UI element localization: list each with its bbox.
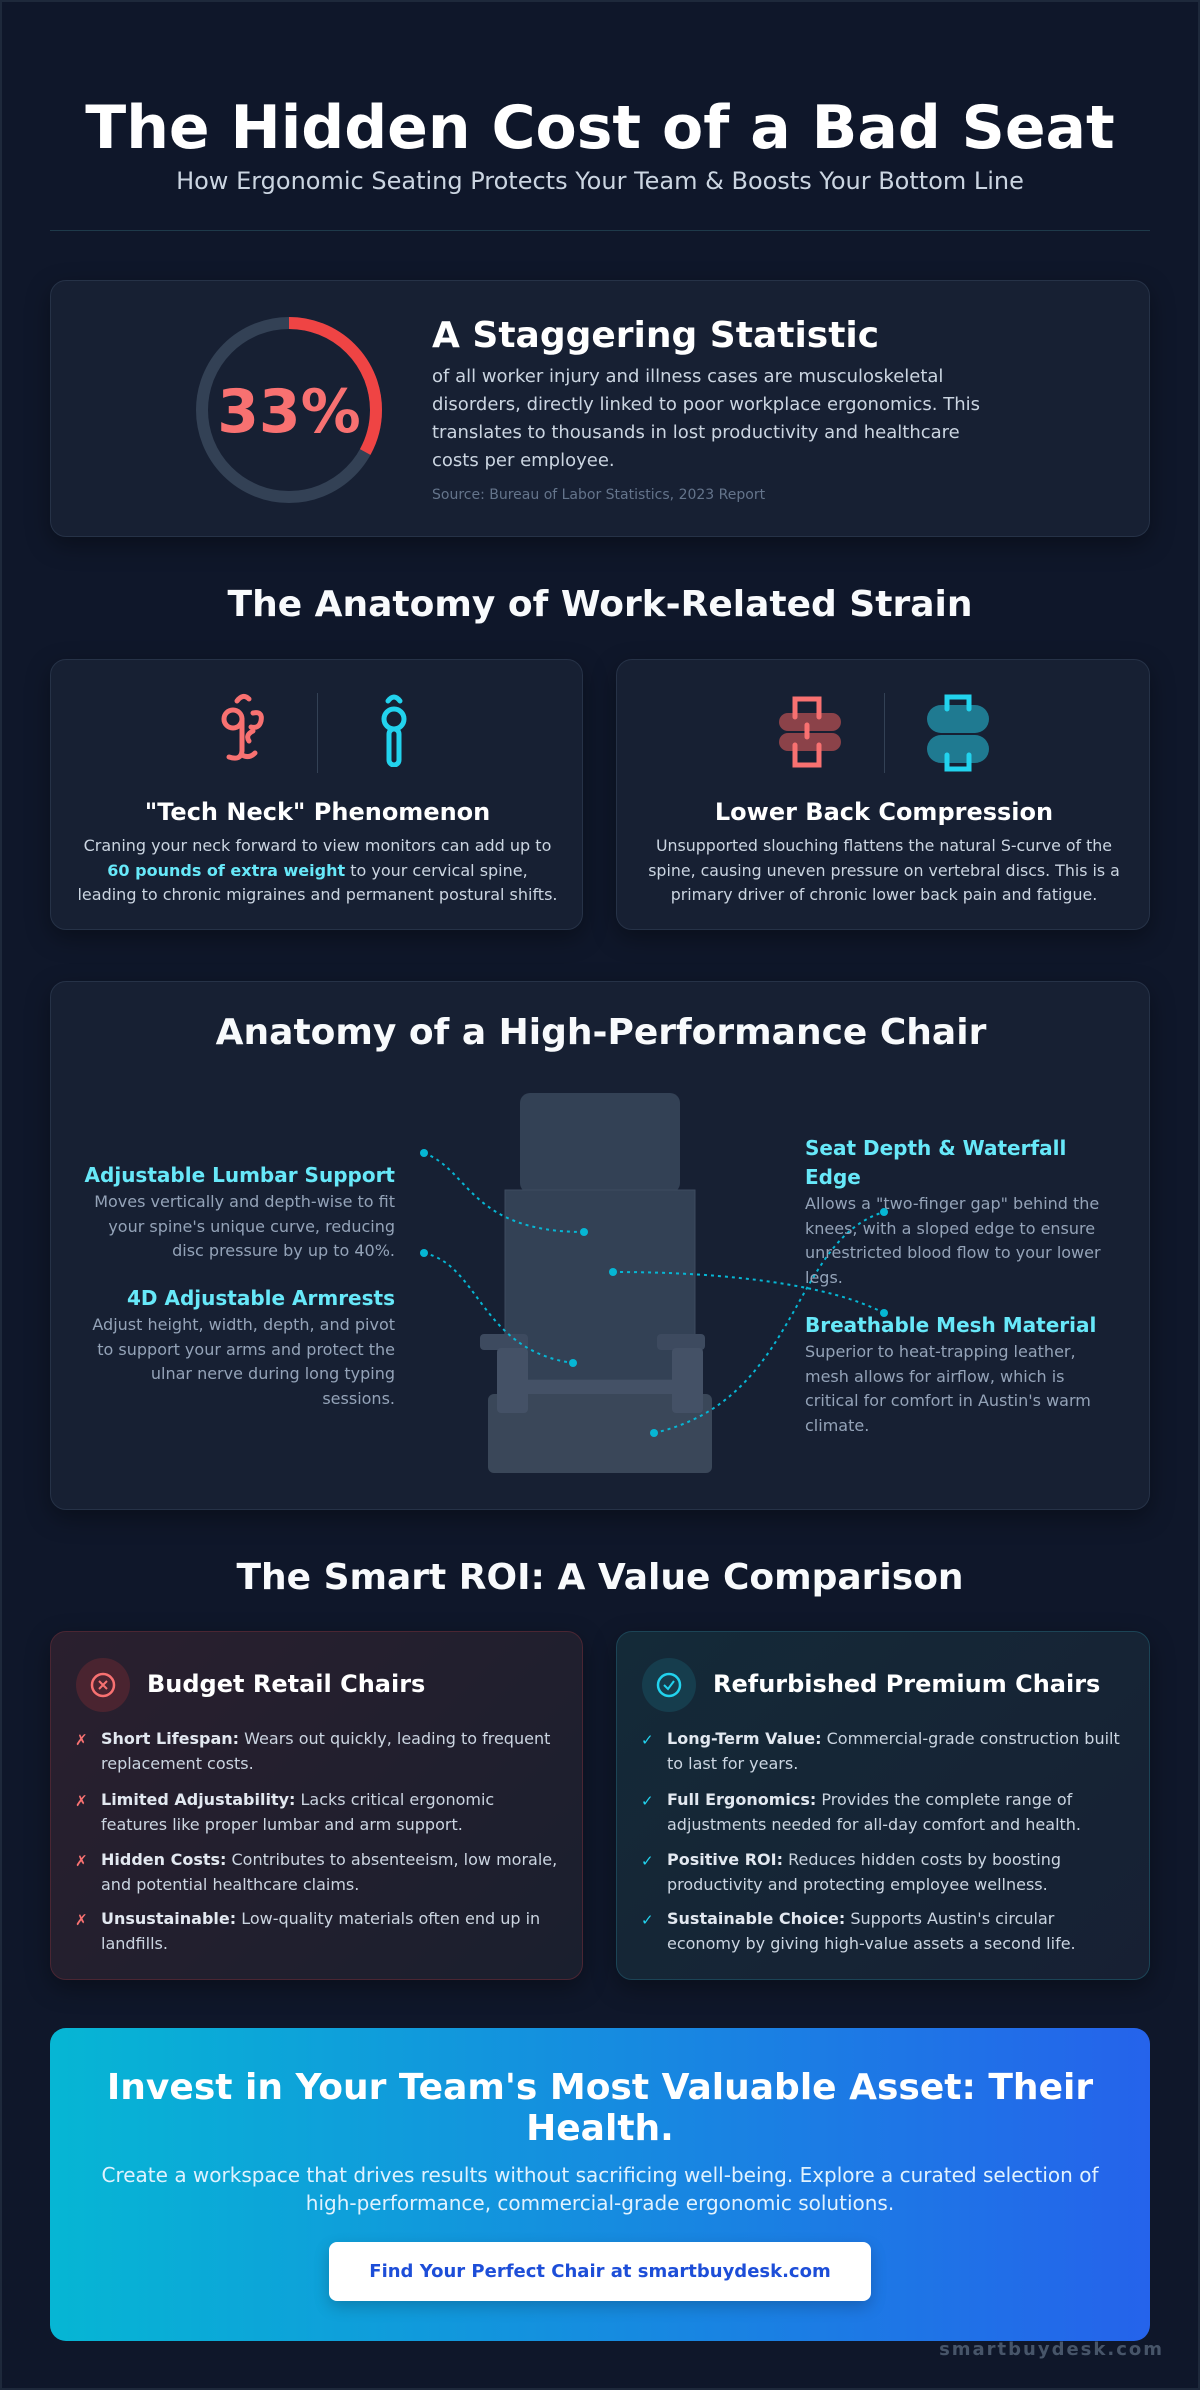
panel: refurbished chairs: ✓ xyxy=(641,1911,654,1929)
callout: lumbar: Moves vertically and depth-wise to fit xyxy=(94,1192,395,1211)
card text xyxy=(648,836,1120,904)
callout: seat depth: legs. xyxy=(805,1268,843,1286)
callout: armrests xyxy=(92,1286,395,1408)
CTA text: high-performance, commercial-grade ergonomic solutions. xyxy=(306,2191,894,2215)
icon: x circle xyxy=(76,1658,130,1712)
card title: Refurbished Premium Chairs xyxy=(713,1670,1100,1698)
panel: tech neck xyxy=(50,659,583,930)
panel: refurbished chairs xyxy=(616,1631,1150,1980)
callout: mesh: Superior to heat-trapping leather, xyxy=(805,1342,1076,1361)
callout: mesh: Breathable Mesh Material xyxy=(805,1313,1096,1337)
panel: refurbished chairs: Full Ergonomics: Provides the complete range of adjustments needed for all-day comfort and health. xyxy=(667,1790,1081,1834)
panel: budget chairs: Unsustainable: Low-quality materials often end up in landfills. xyxy=(101,1909,540,1953)
card text: Craning your neck forward to view monitors can add up to xyxy=(84,836,551,855)
card title: Budget Retail Chairs xyxy=(147,1670,425,1698)
callout: seat depth xyxy=(805,1136,1101,1286)
callout: mesh: mesh allows for airflow, which is xyxy=(805,1366,1064,1386)
footer brand: smartbuydesk.com xyxy=(939,2339,1164,2360)
list: Short Lifespan: Wears out quickly, leading to frequent replacement costs. xyxy=(101,1729,550,1773)
panel: refurbished chairs: ✓ xyxy=(641,1792,654,1810)
callout: armrests: to support your arms and protect the xyxy=(97,1340,395,1358)
callout: mesh: climate. xyxy=(805,1416,869,1434)
panel: budget chairs: ✗ xyxy=(75,1852,88,1870)
icon: check circle xyxy=(642,1658,696,1712)
list: Long-Term Value: Commercial-grade construction built to last for years. xyxy=(667,1729,1120,1773)
chart: 33% ring xyxy=(196,317,382,503)
callout: armrests: 4D Adjustable Armrests xyxy=(127,1286,395,1310)
callout: seat depth: knees, with a sloped edge to ensure xyxy=(805,1218,1095,1238)
card text: Unsupported slouching flattens the natural S-curve of the xyxy=(656,836,1112,855)
card text: 60 pounds of extra weight to your cervical spine, xyxy=(107,860,528,880)
panel: lower back xyxy=(616,659,1150,930)
title: The Hidden Cost of a Bad Seat xyxy=(85,93,1115,163)
callout: armrests: Adjust height, width, depth, and pivot xyxy=(92,1315,395,1334)
callout: armrests: ulnar nerve during long typing xyxy=(151,1364,395,1383)
panel: chair anatomy xyxy=(50,981,1150,1510)
button: Find Your Perfect Chair at smartbuydesk.com xyxy=(369,2261,831,2282)
callout: seat depth: Edge xyxy=(805,1165,861,1189)
CTA heading: Invest in Your Team's Most Valuable Asset: Their Health. xyxy=(107,2067,1093,2149)
panel: refurbished chairs: Positive ROI: Reduces hidden costs by boosting productivity and protecting employee wellness. xyxy=(667,1850,1061,1894)
subtitle: How Ergonomic Seating Protects Your Team & Boosts Your Bottom Line xyxy=(176,167,1024,195)
heading: A Staggering Statistic xyxy=(432,315,879,356)
panel: budget chairs: ✗ xyxy=(75,1731,88,1749)
callout: armrests: sessions. xyxy=(322,1388,395,1408)
icon: good neck posture xyxy=(382,694,406,767)
callout: mesh: critical for comfort in Austin's warm xyxy=(805,1391,1091,1410)
body text: of all worker injury and illness cases are musculoskeletal disorders, directly linked to poor workplace ergonomics. This translates to thousands in lost productivity and healthcare costs per employee. xyxy=(432,366,980,471)
card text xyxy=(77,836,558,904)
panel: budget chairs: Limited Adjustability: Lacks critical ergonomic features like proper lumbar and arm support. xyxy=(101,1790,494,1834)
chair diagram xyxy=(420,1093,888,1473)
heading: Anatomy of a High-Performance Chair xyxy=(216,1012,986,1053)
callout: seat depth: Allows a "two-finger gap" behind the xyxy=(805,1194,1099,1213)
panel: refurbished chairs: ✓ xyxy=(641,1731,654,1749)
panel: statistic xyxy=(50,280,1150,537)
callout: seat depth: unrestricted blood flow to your lower xyxy=(805,1243,1101,1262)
panel: budget chairs: Hidden Costs: Contributes to absenteeism, low morale, and potential healthcare claims. xyxy=(101,1850,557,1894)
CTA text xyxy=(102,2163,1099,2215)
callout: lumbar: disc pressure by up to 40%. xyxy=(172,1241,395,1260)
panel: refurbished chairs: Sustainable Choice: Supports Austin's circular economy by giving high-value assets a second life. xyxy=(667,1909,1076,1953)
callout: seat depth: Seat Depth & Waterfall xyxy=(805,1136,1066,1160)
panel: refurbished chairs: ✓ xyxy=(641,1852,654,1870)
panel: call to action xyxy=(50,2028,1150,2341)
chart: 33% ring: 33% xyxy=(217,377,361,447)
card text: primary driver of chronic lower back pain and fatigue. xyxy=(671,885,1097,904)
panel: budget chairs: ✗ xyxy=(75,1792,88,1810)
callout: lumbar xyxy=(84,1163,395,1260)
callout: lumbar: Adjustable Lumbar Support xyxy=(85,1163,395,1187)
icon: compressed discs xyxy=(779,696,841,768)
heading: strain: The Anatomy of Work-Related Strain xyxy=(228,584,972,625)
panel: budget chairs: ✗ xyxy=(75,1911,88,1929)
CTA text: Create a workspace that drives results without sacrificing well-being. Explore a curated selection of xyxy=(102,2163,1098,2187)
card text: spine, causing uneven pressure on vertebral discs. This is a xyxy=(648,860,1120,880)
panel: budget chairs xyxy=(50,1631,583,1980)
icon: bad neck posture xyxy=(222,694,264,761)
source: Source: Bureau of Labor Statistics, 2023 Report xyxy=(432,487,765,503)
callout: lumbar: your spine's unique curve, reducing xyxy=(108,1216,395,1236)
card text: leading to chronic migraines and permanent postural shifts. xyxy=(77,885,558,904)
icon: healthy discs xyxy=(927,694,989,772)
button xyxy=(329,2242,871,2301)
card title: Lower Back Compression xyxy=(715,798,1053,826)
callout: mesh xyxy=(805,1313,1096,1434)
card title: "Tech Neck" Phenomenon xyxy=(145,798,490,826)
heading: ROI: The Smart ROI: A Value Comparison xyxy=(236,1557,964,1598)
